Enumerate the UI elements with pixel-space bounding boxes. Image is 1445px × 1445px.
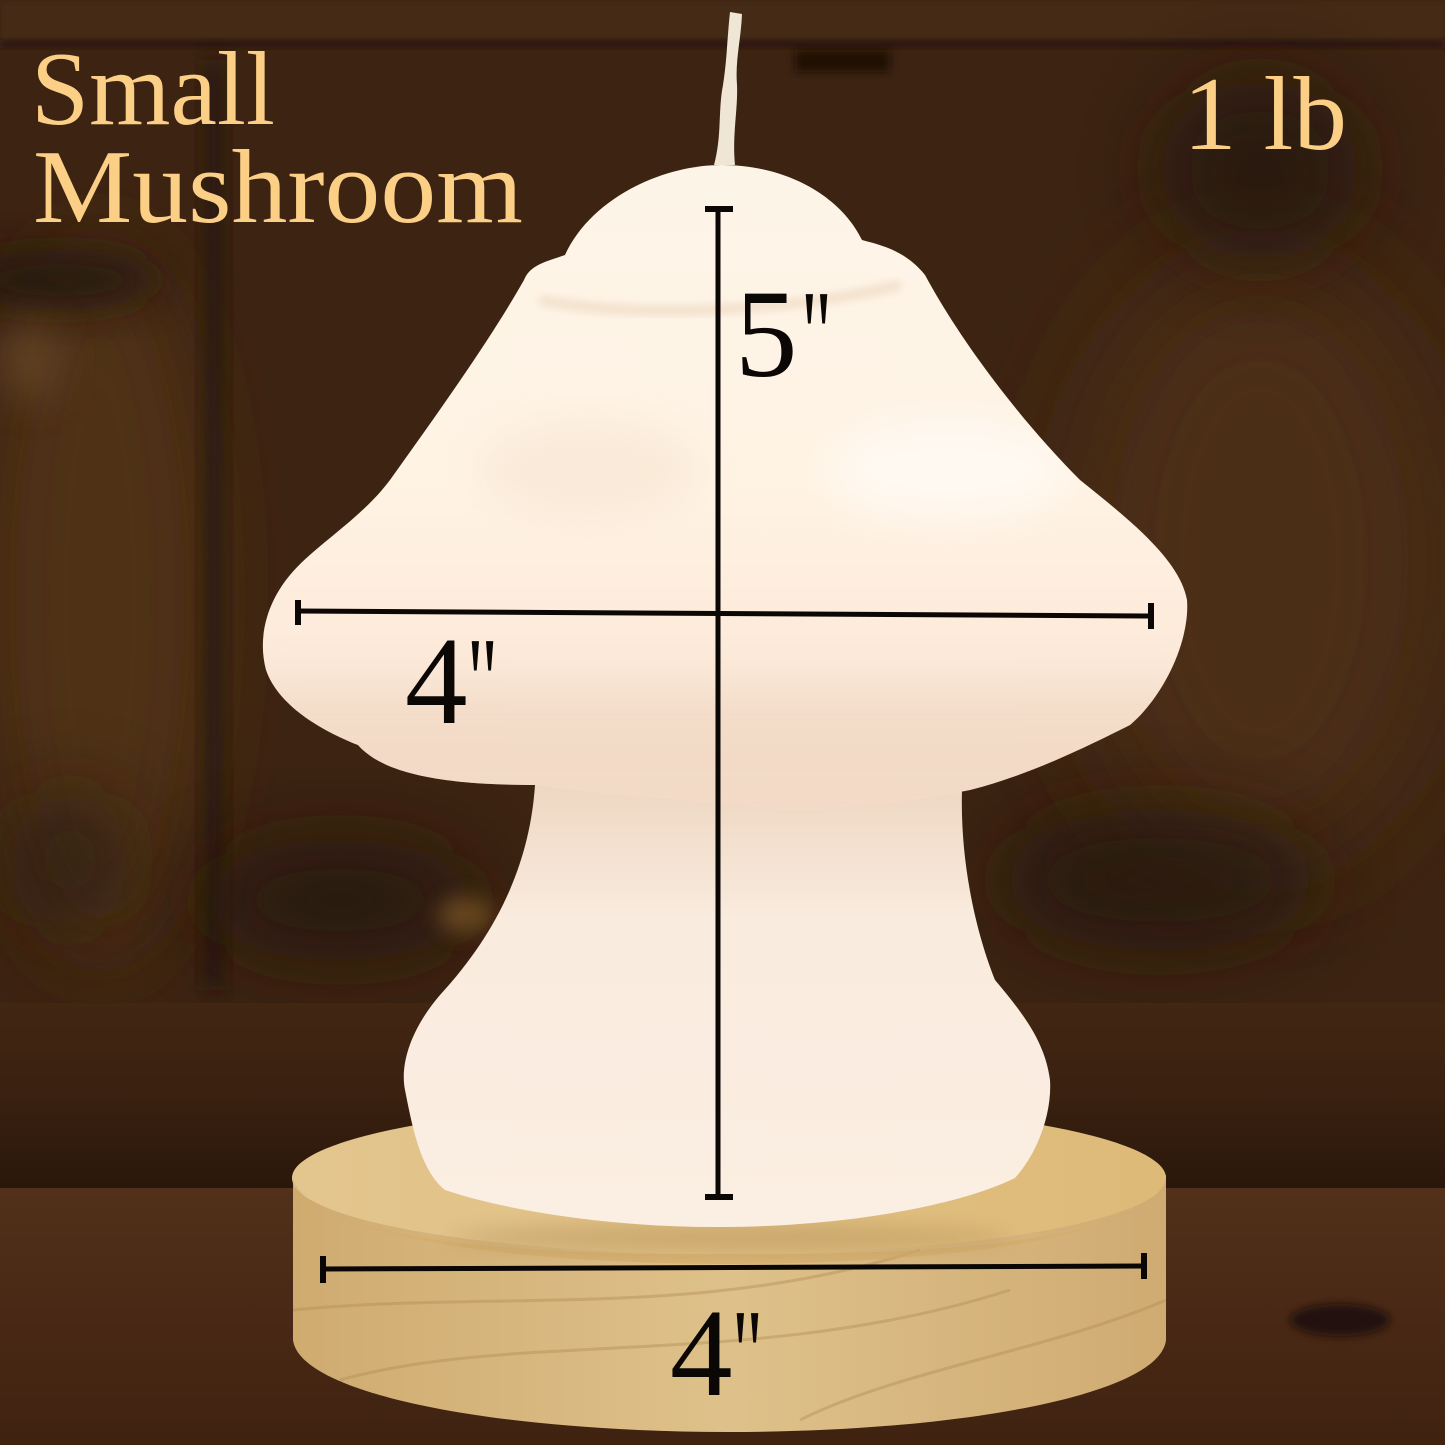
cap shading — [250, 285, 1200, 820]
wood wall background — [0, 0, 1445, 1010]
dimension: height 5 inches: 5 — [735, 266, 798, 404]
candle wick — [714, 12, 742, 165]
dimension: height 5 inches: " — [801, 266, 832, 404]
table surface — [0, 1188, 1445, 1445]
dimension: base width 4 inches: 4 — [670, 1285, 732, 1423]
dimension: base width 4 inches — [323, 1253, 1144, 1423]
title — [31, 30, 523, 245]
stem — [404, 785, 1050, 1227]
mushroom candle — [250, 165, 1200, 1227]
weight label: 1 lb — [1183, 55, 1347, 172]
wooden base — [292, 1102, 1166, 1432]
dimension: height 5 inches — [705, 209, 832, 1197]
dimension: base width 4 inches: " — [732, 1285, 763, 1423]
cap — [263, 165, 1187, 810]
title: Mushroom — [33, 128, 523, 245]
title: Small — [31, 30, 275, 147]
dimension: cap width 4 inches — [298, 600, 1151, 751]
dimension: cap width 4 inches: " — [467, 613, 498, 751]
shelf ledge — [0, 1003, 1445, 1188]
dimension: cap width 4 inches: 4 — [405, 613, 468, 751]
